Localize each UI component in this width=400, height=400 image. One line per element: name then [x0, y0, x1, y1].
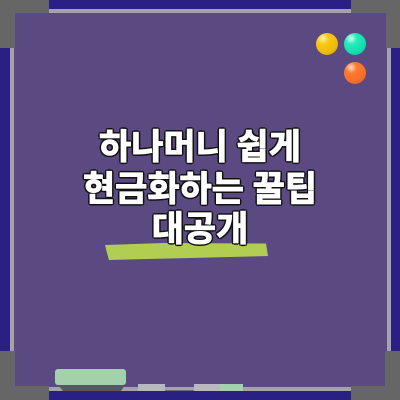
- frame: light right edge: [387, 48, 391, 351]
- icon: teal ball: [344, 33, 366, 55]
- tab: notch strip: [165, 390, 194, 391]
- highlight: green brush stroke: [105, 243, 268, 260]
- title: 대공개: [152, 210, 248, 249]
- title: [82, 127, 317, 249]
- icon: yellow ball: [316, 33, 338, 55]
- title: 현금화하는 꿀팁: [83, 170, 317, 209]
- button: dark shadow base: [58, 385, 125, 391]
- frame: light bottom edge: [49, 387, 351, 391]
- frame: navy left bar: [0, 48, 10, 351]
- frame: light top edge: [49, 9, 351, 13]
- tab: gray center: [138, 384, 165, 391]
- tab: gray right: [194, 384, 220, 391]
- frame: navy top bar: [49, 0, 351, 9]
- title: 하나머니 쉽게: [99, 128, 301, 167]
- frame: navy bottom bar: [49, 391, 351, 400]
- corner: top left: [0, 0, 49, 48]
- corner: top right: [351, 0, 400, 48]
- corner: bottom right: [351, 351, 400, 400]
- button: green: [55, 369, 126, 385]
- tab: green right: [220, 384, 243, 391]
- corner: bottom left: [0, 351, 49, 400]
- frame: navy right bar: [391, 48, 400, 351]
- icon: orange ball: [344, 62, 366, 84]
- frame: light left edge: [10, 48, 14, 351]
